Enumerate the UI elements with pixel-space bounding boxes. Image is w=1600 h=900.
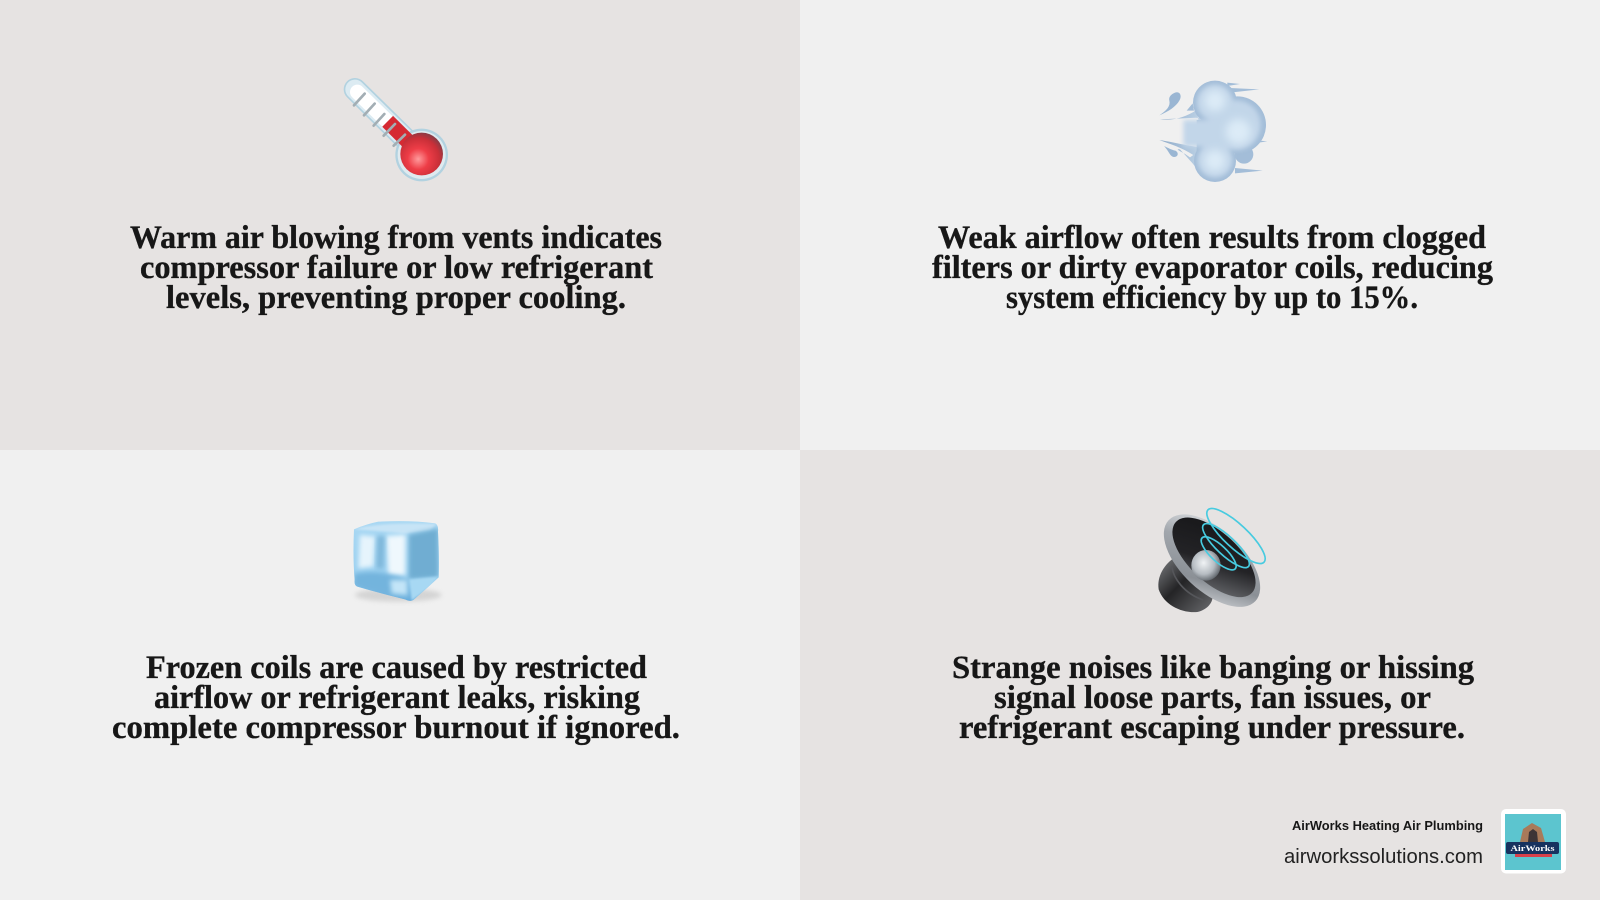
heading: frozen coils text: complete compressor burnout if ignored. bbox=[112, 710, 680, 746]
puff mid-tone bbox=[1183, 85, 1261, 177]
logo: AirWorks bbox=[1510, 844, 1554, 853]
heading: weak airflow text: Weak airflow often results from clogged bbox=[938, 220, 1486, 256]
brand url: airworkssolutions.com bbox=[1284, 846, 1483, 868]
heading: frozen coils text bbox=[112, 650, 680, 746]
heading: warm air text: Warm air blowing from vents indicates bbox=[130, 220, 662, 256]
panel: frozen coils bbox=[0, 450, 800, 900]
icon: speaker bbox=[1148, 498, 1276, 624]
heading: warm air text bbox=[130, 220, 662, 316]
brand name: AirWorks Heating Air Plumbing bbox=[1292, 818, 1483, 833]
panel: strange noises bbox=[800, 450, 1600, 900]
icon: wind cloud bbox=[1159, 81, 1267, 182]
heading: strange noises text: Strange noises like banging or hissing bbox=[952, 650, 1474, 686]
heading: strange noises text: signal loose parts, fan issues, or bbox=[994, 680, 1431, 716]
logo bbox=[1501, 809, 1566, 874]
panel: weak airflow bbox=[800, 0, 1600, 450]
panel: warm air bbox=[0, 0, 800, 450]
icon: thermometer bbox=[354, 89, 448, 181]
heading: weak airflow text: filters or dirty evaporator coils, reducing bbox=[932, 250, 1493, 286]
heading: strange noises text bbox=[952, 650, 1474, 746]
icon: ice cube bbox=[353, 521, 442, 602]
heading: warm air text: compressor failure or low refrigerant bbox=[140, 250, 653, 286]
heading: weak airflow text bbox=[932, 220, 1493, 316]
heading: weak airflow text: system efficiency by up to 15%. bbox=[1006, 280, 1418, 316]
heading: frozen coils text: airflow or refrigerant leaks, risking bbox=[154, 680, 640, 716]
heading: frozen coils text: Frozen coils are caused by restricted bbox=[146, 650, 647, 686]
puff highlight bbox=[1204, 90, 1251, 171]
heading: strange noises text: refrigerant escaping under pressure. bbox=[959, 710, 1465, 746]
puff silhouette bbox=[1193, 81, 1266, 182]
heading: warm air text: levels, preventing proper cooling. bbox=[166, 280, 626, 316]
